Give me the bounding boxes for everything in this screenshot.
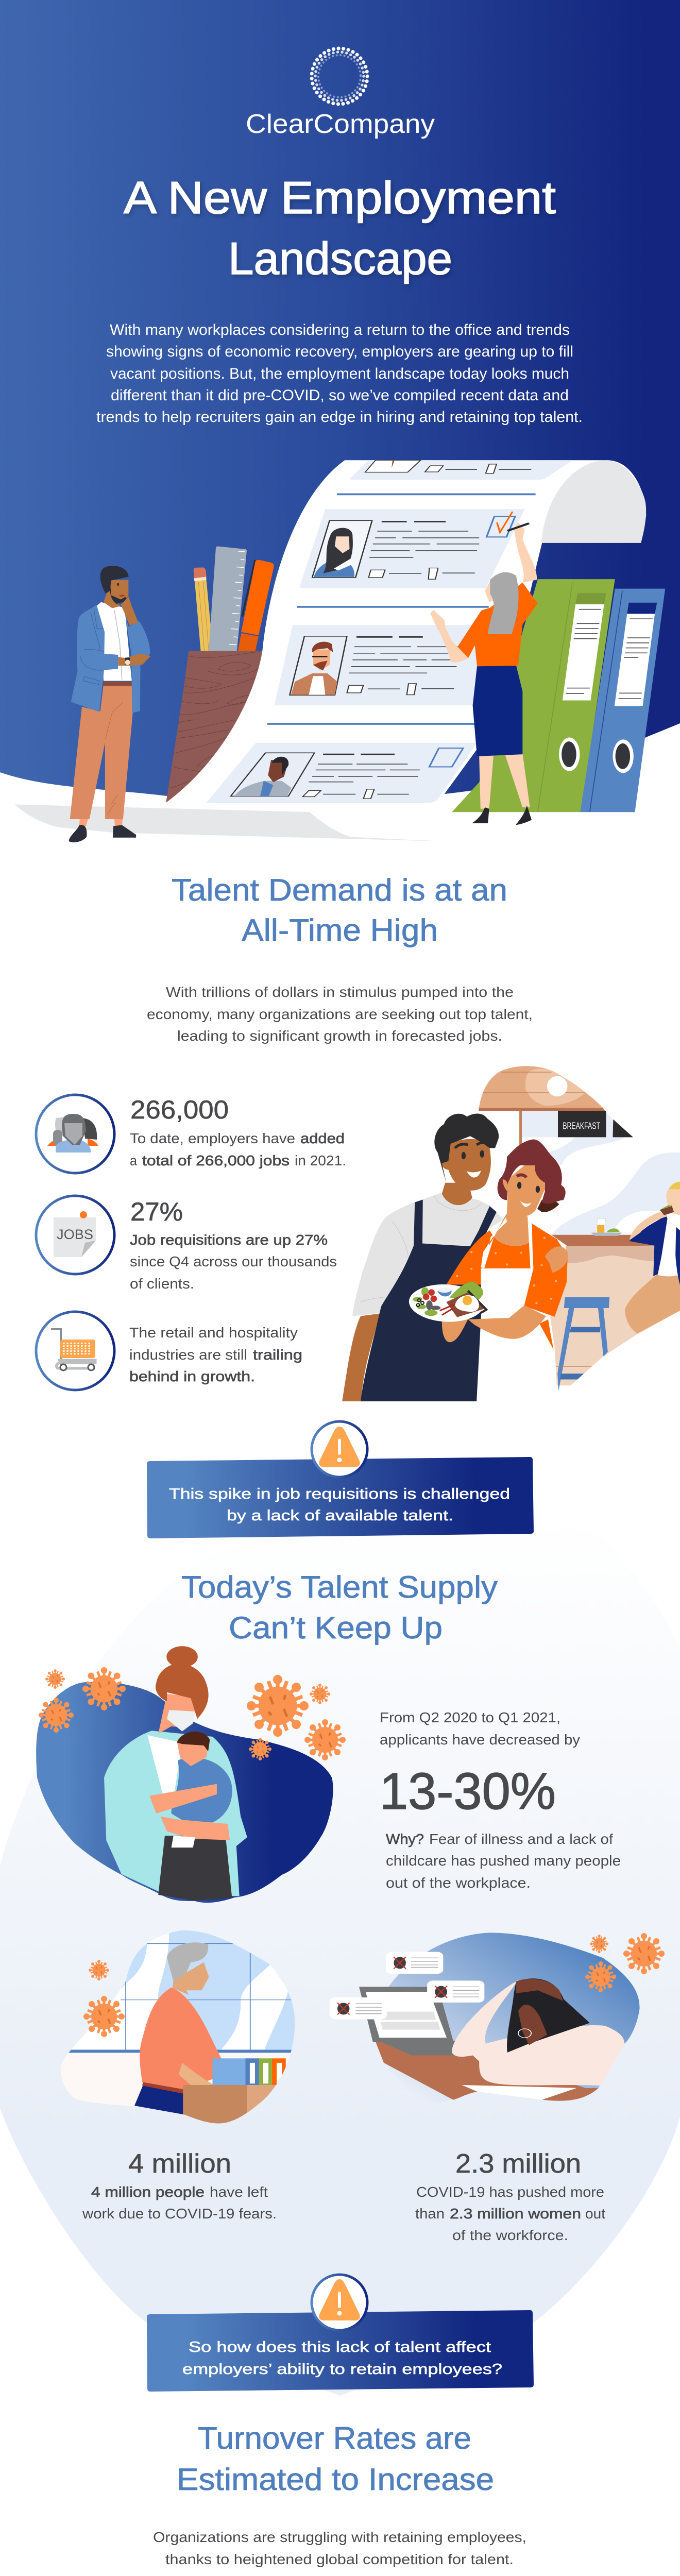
paragraph: turnover: Organizations are struggling with retaining employees, [153,2529,526,2545]
virus icons: laptop [585,1933,665,1992]
stat: 2.3 million: of the workforce. [452,2227,568,2243]
person: thinking man [69,566,151,842]
stat: 27% requisitions: Job requisitions are up 27% [130,1232,328,1248]
stat: 266,000 jobs [36,1095,346,1173]
icon: jobs notice: JOBS [57,1227,93,1242]
person [104,1646,247,1901]
floor cutout [557,1311,680,1401]
box with binders [183,2058,291,2126]
intro paragraph: vacant positions. But, the employment landscape today looks much [110,365,569,382]
stat: applicants decreased: From Q2 2020 to Q1 2021, [380,1709,560,1725]
logo: ClearCompany [246,48,435,139]
divider rule [267,494,536,724]
stat: retail and hospitality: behind in growth. [129,1368,255,1384]
stat: 266,000 jobs: To date, employers have [130,1130,295,1146]
stat: 2.3 million [415,2149,605,2243]
callout: spike in requisitions: This spike in job requisitions is challenged [169,1486,510,1502]
title: A New Employment [124,172,556,223]
heading: talent supply: Can’t Keep Up [229,1611,443,1645]
desk [375,2041,599,2101]
icon: warning [312,1421,367,1477]
callout: spike in requisitions: by a lack of available talent. [227,1507,453,1524]
title [124,172,556,284]
paragraph: turnover: thanks to heightened global competition for talent. [165,2551,514,2567]
intro paragraph [96,321,583,426]
panel: talent supply background [0,1517,680,2396]
heading: talent demand: All-Time High [242,913,438,947]
intro paragraph: showing signs of economic recovery, employers are gearing up to fill [106,343,573,360]
stat: 2.3 million: 2.3 million women [450,2206,581,2222]
heading: turnover: Estimated to Increase [177,2462,494,2497]
paragraph: talent demand: leading to significant growth in forecasted jobs. [177,1028,502,1044]
illustration: mother with child [36,1646,346,1903]
binder: green [452,579,615,812]
paragraph: talent demand: With trillions of dollars in stimulus pumped into the [166,984,514,1000]
illustration: restaurant staff [342,1066,680,1401]
logo: ClearCompany: ClearCompany [246,109,435,139]
stat: 266,000 jobs: in 2021. [295,1153,346,1168]
stat: applicants decreased: 13-30% [380,1762,556,1820]
virus icons: old man [83,1960,125,2037]
stat: 2.3 million: out [585,2206,605,2222]
panel: hero background [0,0,680,801]
heading: turnover [177,2421,494,2497]
illustration: woman at laptop [330,1933,640,2102]
stat: 4 million [82,2149,277,2222]
stat: 4 million: 4 million people [91,2184,205,2200]
resume card: top [349,460,572,480]
icon: shopping cart [36,1312,114,1390]
blob [377,1933,640,2102]
illustration: man leaving with box [56,1928,299,2126]
intro paragraph: different than it did pre-COVID, so we’ve compiled recent data and [111,387,569,404]
stat: 2.3 million: COVID-19 has pushed more [416,2184,604,2200]
stat: applicants decreased [380,1709,621,1891]
laptop [359,1987,481,2056]
stat: applicants decreased: Why? [386,1831,424,1847]
stat: applicants decreased: childcare has pushed many people [386,1853,621,1869]
stat: 27% requisitions: of clients. [130,1276,194,1292]
paragraph: talent demand: economy, many organizations are seeking out top talent, [147,1006,533,1022]
heading: talent demand: Talent Demand is at an [172,873,507,907]
illustration: pen holder [166,546,274,803]
heading: talent supply [181,1570,498,1645]
resume card: man with glasses [275,625,477,705]
stat: 266,000 jobs: added [300,1130,345,1146]
stat: 4 million: have left [210,2184,268,2200]
virus icons [39,1667,346,1760]
blob background [36,1682,333,1903]
stat: applicants decreased: Fear of illness and a lack of [429,1831,613,1847]
sign: breakfast [558,1111,633,1137]
callout: retention question: So how does this lack of talent affect [189,2339,491,2355]
icon: people group [36,1095,114,1173]
stat: retail and hospitality: trailing [253,1347,302,1363]
stat: 266,000 jobs: total of 266,000 jobs [142,1153,290,1168]
plate of food [408,1281,486,1324]
heading: talent supply: Today’s Talent Supply [181,1570,498,1604]
person: server woman [408,1140,568,1350]
stat: applicants decreased: applicants have decreased by [380,1732,580,1748]
stool [556,1297,609,1391]
icon: jobs notice [36,1196,114,1274]
stat: 2.3 million: than [415,2206,445,2222]
stat: 2.3 million: 2.3 million [455,2149,581,2179]
resume card: woman [300,509,525,588]
stat: retail and hospitality: industries are still [129,1347,247,1363]
resume scroll paper [166,460,646,809]
floor shadow [14,804,444,841]
scroll curl [541,460,646,543]
person: server man [342,1113,504,1401]
stat: 4 million: work due to COVID-19 fears. [82,2206,277,2222]
sign: breakfast: BREAKFAST [563,1120,600,1131]
stat: applicants decreased: out of the workplace. [386,1875,531,1891]
paragraph: talent demand [147,984,533,1044]
pale background waves [479,1111,680,1235]
person: woman checking the list [430,522,538,825]
person [134,1942,224,2114]
stat: 266,000 jobs: a [130,1153,137,1168]
paragraph: turnover [153,2529,526,2567]
notification cards [330,1952,484,2020]
stat: 4 million: 4 million [128,2149,231,2179]
woman [452,1980,624,2086]
heading: talent demand [172,873,507,947]
callout: retention question [147,2275,534,2392]
intro paragraph: With many workplaces considering a return to the office and trends [110,321,570,338]
heading: turnover: Turnover Rates are [198,2421,471,2455]
illustration: hero resume scroll [166,460,665,825]
stat: 27% requisitions: 27% [130,1197,183,1226]
resume card: man with tie [206,743,477,803]
binder: blue [580,589,665,812]
person: customer eating [625,1182,680,1333]
stat: 27% requisitions: since Q4 across our thousands [130,1253,337,1269]
stat: retail and hospitality: The retail and hospitality [129,1325,298,1341]
callout: retention question: employers’ ability to retain employees? [182,2361,502,2378]
title: Landscape [228,233,452,284]
icon: warning [312,2275,367,2330]
stat: 27% requisitions [36,1196,337,1292]
umbrella [479,1066,605,1149]
table [550,1218,680,1385]
callout: spike in requisitions [147,1421,534,1538]
stat: 266,000 jobs: 266,000 [130,1095,229,1124]
stat: retail and hospitality [36,1312,302,1390]
intro paragraph: trends to help recruiters gain an edge in hiring and retaining top talent. [96,409,583,426]
